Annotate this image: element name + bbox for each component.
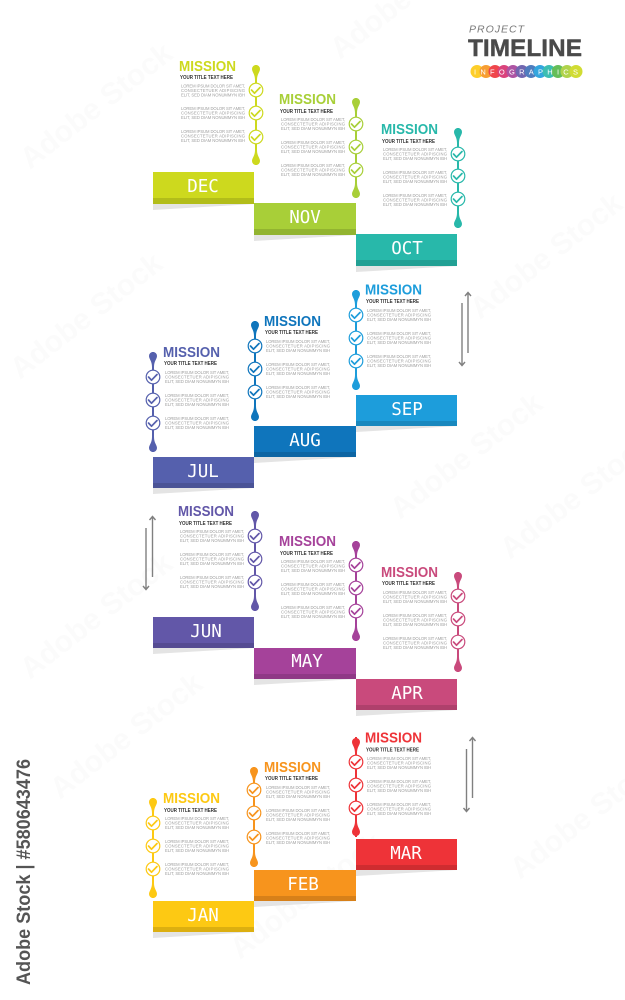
check icons: MAR [349, 755, 363, 815]
month tab: OCT: OCT [391, 239, 423, 259]
logo: project timeline infographics [468, 24, 582, 78]
month tab: MAR [356, 839, 457, 876]
check icons: SEP [349, 308, 363, 368]
text: SEP: CONSECTETUER ADIPISCING [367, 358, 431, 364]
text: DEC [179, 59, 245, 143]
panel: APR [356, 565, 465, 716]
text: MAR: MISSION [365, 730, 422, 746]
text: MAY: YOUR TITLE TEXT HERE [280, 551, 333, 557]
timeline connector: MAR [352, 737, 360, 837]
month tab: JUN: JUN [190, 622, 222, 642]
text: MAY: LOREM IPSUM DOLOR SIT AMET, [281, 582, 345, 587]
panel: JUL [146, 345, 254, 494]
text: DEC: CONSECTETUER ADIPISCING [181, 88, 245, 93]
text: APR: LOREM IPSUM DOLOR SIT AMET, [383, 590, 447, 595]
text: OCT: ELIT, SED DIAM NONUMMYN IBH [383, 156, 447, 161]
text: OCT: YOUR TITLE TEXT HERE [382, 139, 435, 145]
text: SEP: LOREM IPSUM DOLOR SIT AMET, [367, 308, 431, 313]
text: NOV: CONSECTETUER ADIPISCING [281, 144, 345, 150]
text: AUG: YOUR TITLE TEXT HERE [265, 330, 318, 336]
text: NOV: ELIT, SED DIAM NONUMMYN IBH [281, 126, 345, 131]
panel: NOV [254, 92, 363, 241]
timeline connector: SEP [352, 290, 360, 390]
text: MAR: LOREM IPSUM DOLOR SIT AMET, [367, 756, 431, 761]
text: NOV: YOUR TITLE TEXT HERE [280, 109, 333, 115]
month tab: AUG [254, 426, 356, 463]
panel: MAY [254, 534, 363, 685]
check icons: JUL [146, 370, 160, 430]
text: OCT: CONSECTETUER ADIPISCING [383, 198, 447, 202]
month tab: FEB: FEB [287, 875, 319, 895]
text: AUG: CONSECTETUER ADIPISCING [266, 366, 330, 372]
text: MAY: LOREM IPSUM DOLOR SIT AMET, [281, 559, 345, 564]
text: JAN: ELIT, SED DIAM NONUMMYN IBH [165, 825, 229, 830]
text: NOV: ELIT, SED DIAM NONUMMYN IBH [281, 149, 345, 154]
text: FEB [264, 760, 330, 845]
text: MAY: CONSECTETUER ADIPISCING [281, 564, 345, 568]
panel: OCT [356, 122, 465, 272]
month tab: MAR: MAR [390, 844, 422, 864]
watermark pattern: Adobe Stock [464, 186, 625, 326]
text: JUN: ELIT, SED DIAM NONUMMYN IBH [180, 561, 244, 566]
text: JUN [178, 504, 244, 589]
text: JAN: CONSECTETUER ADIPISCING [165, 844, 229, 848]
month tab: DEC: DEC [187, 177, 219, 197]
text: SEP [365, 282, 431, 368]
text: APR: ELIT, SED DIAM NONUMMYN IBH [383, 622, 447, 627]
timeline connector: FEB [250, 767, 258, 867]
panel: AUG [248, 314, 356, 463]
text: OCT: MISSION [381, 122, 438, 138]
text: MAR: ELIT, SED DIAM NONUMMYN IBH [367, 788, 431, 793]
text: NOV: LOREM IPSUM DOLOR SIT AMET, [281, 163, 345, 168]
month tab: APR [356, 679, 457, 716]
text: FEB: ELIT, SED DIAM NONUMMYN IBH [266, 817, 330, 822]
text: SEP: YOUR TITLE TEXT HERE [366, 299, 419, 305]
watermark pattern: Adobe Stock [384, 386, 549, 526]
text: MAY: ELIT, SED DIAM NONUMMYN IBH [281, 568, 345, 573]
timeline connector: AUG [251, 321, 259, 421]
text: JUL: CONSECTETUER ADIPISCING [165, 398, 229, 402]
text: MAR: ELIT, SED DIAM NONUMMYN IBH [367, 765, 431, 770]
text: DEC: ELIT, SED DIAM NONUMMYN IBH [181, 138, 245, 143]
text: MAR: ELIT, SED DIAM NONUMMYN IBH [367, 811, 431, 816]
text: DEC: ELIT, SED DIAM NONUMMYN IBH [181, 92, 245, 98]
text: OCT: LOREM IPSUM DOLOR SIT AMET, [383, 147, 447, 152]
text: JUL: ELIT, SED DIAM NONUMMYN IBH [165, 379, 229, 384]
watermark pattern: Adobe Stock [14, 546, 179, 686]
text: JUL: CONSECTETUER ADIPISCING [165, 374, 229, 380]
text: FEB: LOREM IPSUM DOLOR SIT AMET, [266, 831, 330, 836]
text: JUL: LOREM IPSUM DOLOR SIT AMET, [165, 393, 229, 398]
panel: DEC [153, 59, 263, 210]
text: MAR: LOREM IPSUM DOLOR SIT AMET, [367, 802, 431, 807]
timeline connector: APR [454, 572, 462, 672]
text: JAN: LOREM IPSUM DOLOR SIT AMET, [165, 862, 229, 867]
text: MAR: CONSECTETUER ADIPISCING [367, 784, 431, 788]
timeline connector: OCT [454, 128, 462, 228]
text: OCT: CONSECTETUER ADIPISCING [383, 174, 447, 180]
text: JAN: LOREM IPSUM DOLOR SIT AMET, [165, 839, 229, 844]
text: AUG: CONSECTETUER ADIPISCING [266, 344, 330, 348]
text: JUL: YOUR TITLE TEXT HERE [164, 361, 217, 367]
text: FEB: CONSECTETUER ADIPISCING [266, 836, 330, 840]
text: APR: ELIT, SED DIAM NONUMMYN IBH [383, 645, 447, 650]
month tab: SEP [356, 395, 457, 432]
check icons: NOV [349, 117, 363, 177]
text: JUN: LOREM IPSUM DOLOR SIT AMET, [180, 529, 244, 534]
text: JAN: YOUR TITLE TEXT HERE [164, 808, 217, 814]
text: JUN: MISSION [178, 504, 234, 520]
text: APR: YOUR TITLE TEXT HERE [382, 581, 435, 587]
text: DEC: ELIT, SED DIAM NONUMMYN IBH [181, 115, 245, 120]
text: FEB: MISSION [264, 760, 321, 776]
text: SEP: CONSECTETUER ADIPISCING [367, 336, 431, 340]
text: MAY: CONSECTETUER ADIPISCING [281, 610, 345, 614]
text: JUN: LOREM IPSUM DOLOR SIT AMET, [180, 552, 244, 557]
panel: SEP [349, 282, 457, 432]
watermark pattern: Adobe Stock [4, 246, 169, 386]
panel: FEB [247, 760, 356, 907]
panel: MAR [349, 730, 457, 876]
text: JUL [163, 345, 229, 430]
timeline connector: JAN [149, 798, 157, 898]
text: AUG: CONSECTETUER ADIPISCING [266, 390, 330, 394]
check icons: JUN [248, 529, 262, 589]
month tab: JAN [153, 901, 254, 938]
text: FEB: ELIT, SED DIAM NONUMMYN IBH [266, 840, 330, 845]
text: FEB: CONSECTETUER ADIPISCING [266, 812, 330, 818]
text: MAY [279, 534, 345, 619]
month tab: AUG: AUG [289, 431, 321, 451]
logo word: timeline: TIMELINE [468, 35, 582, 62]
text: DEC: MISSION [179, 59, 236, 75]
text: FEB: LOREM IPSUM DOLOR SIT AMET, [266, 808, 330, 813]
text: APR: ELIT, SED DIAM NONUMMYN IBH [383, 599, 447, 604]
month tab: MAY: MAY [291, 652, 323, 672]
text: JAN: ELIT, SED DIAM NONUMMYN IBH [165, 871, 229, 876]
check icons: OCT [451, 147, 465, 206]
month tab: JUL [153, 457, 254, 494]
text: AUG: ELIT, SED DIAM NONUMMYN IBH [266, 348, 330, 353]
text: JUN: CONSECTETUER ADIPISCING [180, 534, 244, 538]
arrows: JUN row [143, 516, 156, 590]
timeline connector: JUN [251, 511, 259, 611]
text: NOV: CONSECTETUER ADIPISCING [281, 122, 345, 126]
month tab: JUN [153, 617, 254, 654]
text: AUG: ELIT, SED DIAM NONUMMYN IBH [266, 394, 330, 399]
text: FEB: LOREM IPSUM DOLOR SIT AMET, [266, 785, 330, 790]
text: MAY: ELIT, SED DIAM NONUMMYN IBH [281, 614, 345, 619]
text: FEB: ELIT, SED DIAM NONUMMYN IBH [266, 794, 330, 799]
month tab: DEC [153, 172, 254, 210]
text: OCT [381, 122, 447, 207]
month tab: OCT [356, 234, 457, 272]
text: AUG: ELIT, SED DIAM NONUMMYN IBH [266, 371, 330, 376]
panel: JAN [146, 791, 254, 938]
check icons: FEB [247, 783, 261, 844]
text: DEC: LOREM IPSUM DOLOR SIT AMET, [181, 106, 245, 111]
text: JAN: LOREM IPSUM DOLOR SIT AMET, [165, 816, 229, 821]
text: APR: LOREM IPSUM DOLOR SIT AMET, [383, 636, 447, 641]
text: OCT: ELIT, SED DIAM NONUMMYN IBH [383, 179, 447, 184]
text: MAY: LOREM IPSUM DOLOR SIT AMET, [281, 605, 345, 610]
text: APR: CONSECTETUER ADIPISCING [383, 640, 447, 646]
text: NOV: CONSECTETUER ADIPISCING [281, 168, 345, 172]
check icons: DEC [249, 83, 263, 144]
month tab: NOV: NOV [289, 208, 321, 228]
month tab: MAY [254, 648, 356, 685]
text: JUL: LOREM IPSUM DOLOR SIT AMET, [165, 416, 229, 421]
text: DEC: YOUR TITLE TEXT HERE [180, 75, 233, 81]
arrows: MAR row [464, 738, 476, 812]
text: JUN: YOUR TITLE TEXT HERE [179, 521, 232, 527]
text: MAR: LOREM IPSUM DOLOR SIT AMET, [367, 779, 431, 784]
text: NOV: LOREM IPSUM DOLOR SIT AMET, [281, 140, 345, 145]
text: MAY: CONSECTETUER ADIPISCING [281, 586, 345, 592]
month tab: NOV [254, 203, 356, 241]
check icons: JAN [146, 816, 160, 876]
text: APR: CONSECTETUER ADIPISCING [383, 594, 447, 600]
logo word: infographics: INFOGRAPHICS [474, 68, 578, 76]
text: SEP: CONSECTETUER ADIPISCING [367, 312, 431, 318]
text: OCT: ELIT, SED DIAM NONUMMYN IBH [383, 202, 447, 207]
text: SEP: ELIT, SED DIAM NONUMMYN IBH [367, 340, 431, 345]
text: SEP: MISSION [365, 282, 422, 298]
month tab: JAN: JAN [187, 906, 219, 926]
text: JUN: LOREM IPSUM DOLOR SIT AMET, [180, 575, 244, 580]
check icons: MAY [349, 558, 363, 618]
text: JUN: CONSECTETUER ADIPISCING [180, 580, 244, 584]
text: JAN: MISSION [163, 791, 220, 807]
month tab: JUL: JUL [187, 462, 219, 482]
month tab: APR: APR [391, 684, 423, 704]
timeline connector: NOV [352, 98, 360, 198]
watermark pattern: Adobe Stock [44, 666, 209, 806]
text: NOV: ELIT, SED DIAM NONUMMYN IBH [281, 172, 345, 177]
text: MAR: CONSECTETUER ADIPISCING [367, 806, 431, 812]
timeline connector: MAY [352, 541, 360, 641]
text: JAN: CONSECTETUER ADIPISCING [165, 820, 229, 826]
text: MAR [365, 730, 431, 816]
text: JUL: LOREM IPSUM DOLOR SIT AMET, [165, 370, 229, 375]
text: JAN: CONSECTETUER ADIPISCING [165, 866, 229, 872]
timeline connector: JUL [149, 352, 157, 452]
text: NOV: LOREM IPSUM DOLOR SIT AMET, [281, 117, 345, 122]
text: AUG [264, 314, 330, 399]
month tab: FEB [254, 870, 356, 907]
text: SEP: LOREM IPSUM DOLOR SIT AMET, [367, 331, 431, 336]
text: JAN: ELIT, SED DIAM NONUMMYN IBH [165, 848, 229, 853]
stock id sidebar text: Adobe Stock | #580643476 [14, 759, 35, 985]
watermark pattern: Adobe Stock [224, 826, 389, 966]
text: JUL: CONSECTETUER ADIPISCING [165, 420, 229, 426]
text: FEB: CONSECTETUER ADIPISCING [266, 790, 330, 794]
text: SEP: ELIT, SED DIAM NONUMMYN IBH [367, 317, 431, 322]
text: AUG: MISSION [264, 314, 321, 330]
check icons: APR [451, 589, 465, 649]
text: NOV [279, 92, 345, 177]
text: OCT: LOREM IPSUM DOLOR SIT AMET, [383, 170, 447, 175]
watermark pattern: Adobe Stock [14, 36, 179, 176]
text: MAR: YOUR TITLE TEXT HERE [366, 748, 419, 754]
text: JUL: MISSION [163, 345, 220, 361]
logo word: project: PROJECT [469, 24, 526, 36]
check icons: AUG [248, 339, 262, 399]
timeline connector: DEC [252, 65, 260, 165]
text: APR: LOREM IPSUM DOLOR SIT AMET, [383, 613, 447, 618]
text: DEC: LOREM IPSUM DOLOR SIT AMET, [181, 84, 245, 88]
text: AUG: LOREM IPSUM DOLOR SIT AMET, [266, 339, 330, 344]
text: JAN [163, 791, 229, 876]
text: APR: MISSION [381, 565, 438, 581]
text: JUN: ELIT, SED DIAM NONUMMYN IBH [180, 538, 244, 543]
text: OCT: LOREM IPSUM DOLOR SIT AMET, [383, 193, 447, 198]
logo: rainbow circles [470, 65, 582, 78]
text: DEC: CONSECTETUER ADIPISCING [181, 110, 245, 116]
text: OCT: CONSECTETUER ADIPISCING [383, 152, 447, 156]
text: APR: CONSECTETUER ADIPISCING [383, 618, 447, 622]
text: AUG: LOREM IPSUM DOLOR SIT AMET, [266, 385, 330, 390]
text: MAY: ELIT, SED DIAM NONUMMYN IBH [281, 591, 345, 596]
text: NOV: MISSION [279, 92, 336, 108]
text: APR [381, 565, 447, 650]
text: DEC: LOREM IPSUM DOLOR SIT AMET, [181, 129, 245, 134]
text: JUN: CONSECTETUER ADIPISCING [180, 556, 244, 562]
text: FEB: YOUR TITLE TEXT HERE [265, 776, 318, 782]
text: JUN: ELIT, SED DIAM NONUMMYN IBH [180, 584, 244, 589]
month tab: SEP: SEP [391, 400, 423, 420]
text: DEC: CONSECTETUER ADIPISCING [181, 134, 245, 138]
text: MAR: CONSECTETUER ADIPISCING [367, 760, 431, 766]
text: MAY: MISSION [279, 534, 336, 550]
panel: JUN [153, 504, 262, 654]
arrows: SEP row [459, 292, 471, 366]
text: JUL: ELIT, SED DIAM NONUMMYN IBH [165, 425, 229, 430]
text: SEP: LOREM IPSUM DOLOR SIT AMET, [367, 354, 431, 359]
text: JUL: ELIT, SED DIAM NONUMMYN IBH [165, 402, 229, 407]
text: AUG: LOREM IPSUM DOLOR SIT AMET, [266, 362, 330, 367]
text: SEP: ELIT, SED DIAM NONUMMYN IBH [367, 363, 431, 368]
